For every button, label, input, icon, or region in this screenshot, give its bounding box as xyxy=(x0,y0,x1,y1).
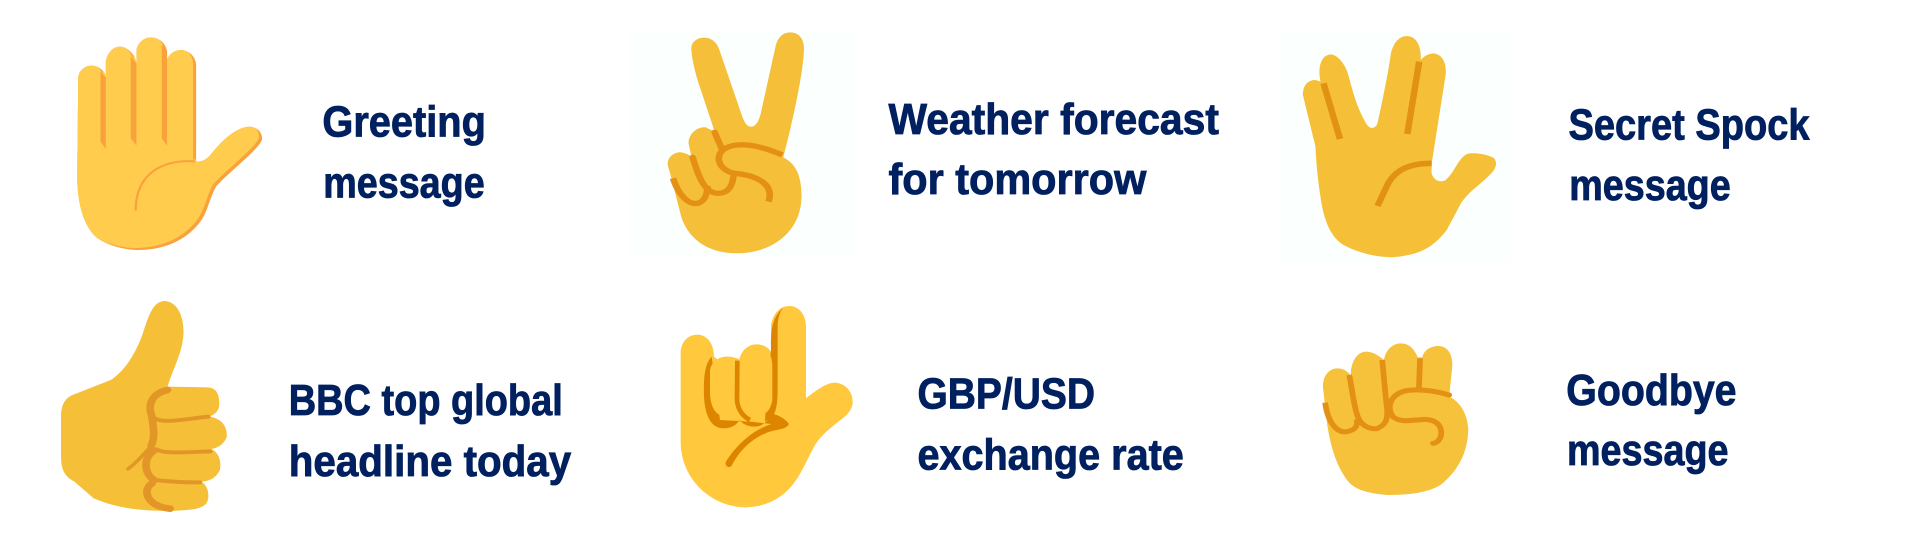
label: weather forecast for tomorrow: for tomorrow xyxy=(888,156,1147,204)
label: goodbye message: Goodbye xyxy=(1566,366,1737,414)
icon: raised hand xyxy=(74,35,262,250)
label: weather forecast for tomorrow xyxy=(888,96,1219,204)
label: bbc top global headline today: headline today xyxy=(289,437,571,485)
hand gesture grid xyxy=(61,32,1810,512)
panel: weather forecast xyxy=(630,30,1219,257)
label: bbc top global headline today xyxy=(289,376,571,485)
label: secret spock message: Secret Spock xyxy=(1568,100,1810,149)
icon: raised fist xyxy=(1323,343,1468,495)
panel: goodbye xyxy=(1323,343,1737,495)
label: secret spock message: message xyxy=(1569,161,1731,209)
label: gbp/usd exchange rate: exchange rate xyxy=(917,430,1184,479)
label: secret spock message xyxy=(1568,100,1810,209)
icon backdrop xyxy=(630,30,857,257)
panel: exchange rate xyxy=(681,306,1184,507)
panel: greeting xyxy=(74,35,486,250)
panel: bbc headline xyxy=(61,301,571,511)
icon backdrop xyxy=(1281,30,1513,262)
icon: thumbs up xyxy=(61,301,227,511)
label: bbc top global headline today: BBC top global xyxy=(289,376,563,424)
label: greeting message: Greeting xyxy=(322,98,486,146)
label: gbp/usd exchange rate: GBP/USD xyxy=(917,370,1095,418)
panel: secret spock xyxy=(1281,30,1810,262)
label: greeting message xyxy=(322,98,486,207)
label: goodbye message xyxy=(1566,366,1737,474)
label: greeting message: message xyxy=(323,158,485,207)
icon: love-you style hand xyxy=(681,306,853,507)
icon: victory hand xyxy=(668,32,804,253)
label: goodbye message: message xyxy=(1567,426,1729,474)
label: gbp/usd exchange rate xyxy=(917,370,1184,479)
label: weather forecast for tomorrow: Weather forecast xyxy=(888,96,1219,144)
icon: vulcan salute hand xyxy=(1303,36,1496,257)
